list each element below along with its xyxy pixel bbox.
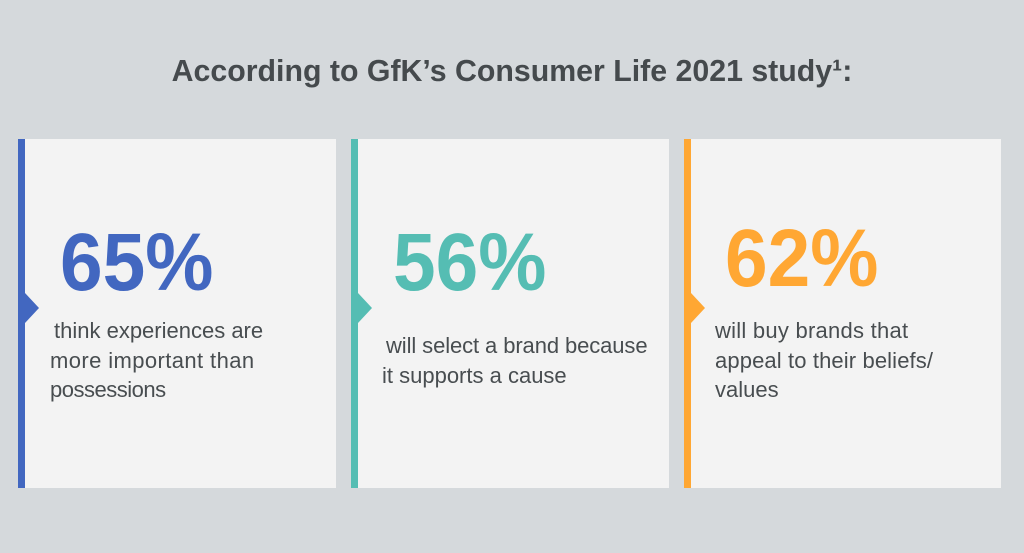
statistic 65%: 65% [60,217,213,308]
description: think experiences are more important than possessions [50,318,263,402]
panel: 62% beliefs [684,139,1001,488]
arrow marker teal [358,293,372,323]
accent bar orange [684,139,691,488]
panel: 65% experiences [18,139,336,488]
statistic 56%: 56% [393,217,546,308]
statistic 62%: 62% [725,213,878,304]
description: will select a brand because it supports a cause [382,333,647,388]
title: According to GfK’s Consumer Life 2021 study¹: [172,55,852,88]
accent bar teal [351,139,358,488]
arrow marker orange [691,293,705,323]
accent bar blue [18,139,25,488]
panel: 56% cause [351,139,669,488]
arrow marker blue [25,293,39,323]
description: will buy brands that appeal to their beliefs/ values [715,318,933,402]
